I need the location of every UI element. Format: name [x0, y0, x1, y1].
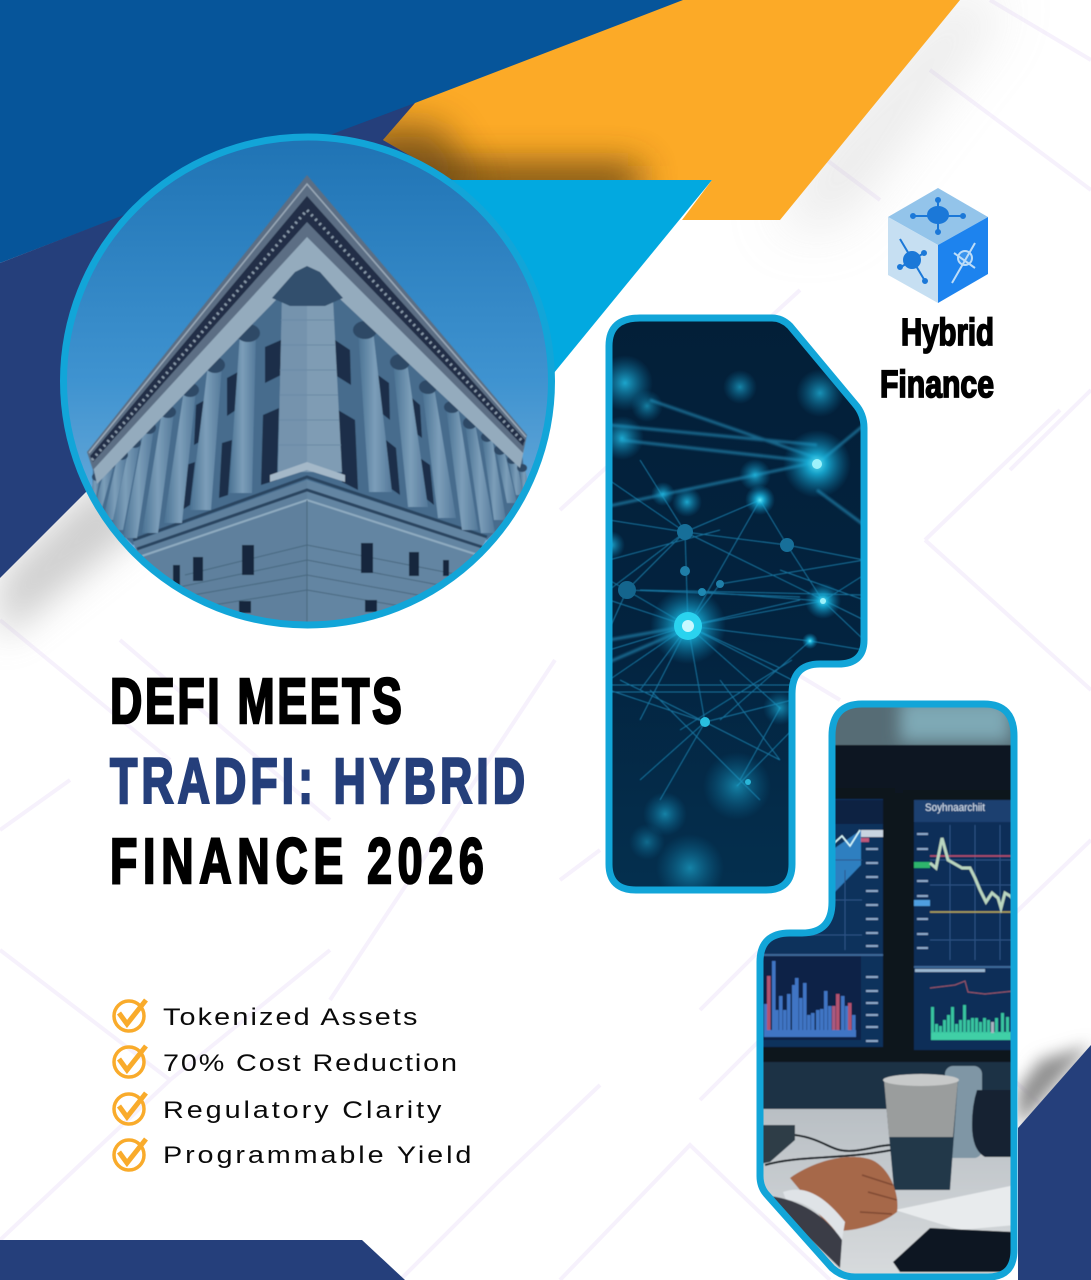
- panel: network image: [597, 310, 870, 902]
- photo: classical bank building in a circle: [64, 137, 552, 640]
- check item: Regulatory Clarity: Regulatory Clarity: [163, 1096, 442, 1123]
- right columns: [358, 330, 529, 533]
- cube left network icon: [898, 239, 927, 283]
- monitor title: Soyhnaarchiit: [925, 802, 985, 814]
- title: TRADFI: HYBRID: [110, 745, 525, 817]
- bright nodes: [650, 430, 851, 785]
- cube right network icon: [952, 243, 975, 283]
- paper cup: [883, 1074, 959, 1190]
- check item: Programmable Yield: Programmable Yield: [163, 1141, 471, 1168]
- orange band: [360, 0, 960, 220]
- logo wordmark: [880, 312, 994, 406]
- top blue band: [0, 0, 685, 263]
- check item: 70% Cost Reduction: 70% Cost Reduction: [163, 1049, 457, 1076]
- navy band left: [0, 103, 470, 578]
- navy bar bottom left: [0, 1240, 405, 1280]
- logo wordmark: Finance: [880, 364, 994, 406]
- grey shadow: lower left: [0, 478, 150, 640]
- desk: [755, 1109, 1020, 1280]
- panel: trading desk image: [755, 700, 1020, 1280]
- corner pier: [270, 266, 345, 482]
- cornice: [87, 175, 527, 470]
- navy corner bottom right: [1018, 1045, 1091, 1280]
- title: DEFI MEETS: [110, 665, 402, 737]
- left windows: [182, 340, 281, 510]
- left columns: [90, 333, 256, 538]
- blurred wall: [836, 708, 1010, 746]
- grey shadow: top right: [780, 0, 1000, 220]
- title: FINANCE 2026: [110, 825, 484, 897]
- logo wordmark: Hybrid: [901, 312, 994, 354]
- phone: [893, 1228, 1014, 1272]
- right monitor: [913, 799, 1010, 1051]
- cube top network icon: [911, 198, 965, 234]
- right windows: [335, 340, 434, 505]
- network lines: [609, 460, 864, 800]
- column capitals: [92, 321, 527, 481]
- frieze: [93, 233, 524, 484]
- check item: Tokenized Assets: Tokenized Assets: [163, 1003, 417, 1030]
- grey shadow: lower right: [1018, 1045, 1091, 1128]
- laptop and cable: [755, 1125, 892, 1165]
- soft glowing nodes: [612, 357, 842, 886]
- image base: [894, 792, 904, 1063]
- network panel border: [609, 318, 864, 890]
- circle border: [64, 137, 552, 625]
- bright network lines: [609, 400, 864, 662]
- cyan wedge: [400, 180, 712, 390]
- dark mug: [972, 1090, 1010, 1158]
- glass: [945, 1066, 982, 1158]
- hand and sleeve: [770, 1157, 898, 1268]
- building wings: [92, 299, 524, 546]
- back of room: [755, 1062, 1020, 1110]
- cube logo: [888, 188, 988, 303]
- paper on desk: [895, 1185, 1015, 1230]
- title: [110, 665, 525, 897]
- right monitor volume bars: [931, 1005, 1009, 1033]
- stone base: [133, 477, 487, 640]
- checklist: [114, 1000, 471, 1170]
- left monitor bar chart: [764, 961, 856, 1037]
- left monitor: [764, 798, 884, 1048]
- trading panel border: [760, 704, 1014, 1277]
